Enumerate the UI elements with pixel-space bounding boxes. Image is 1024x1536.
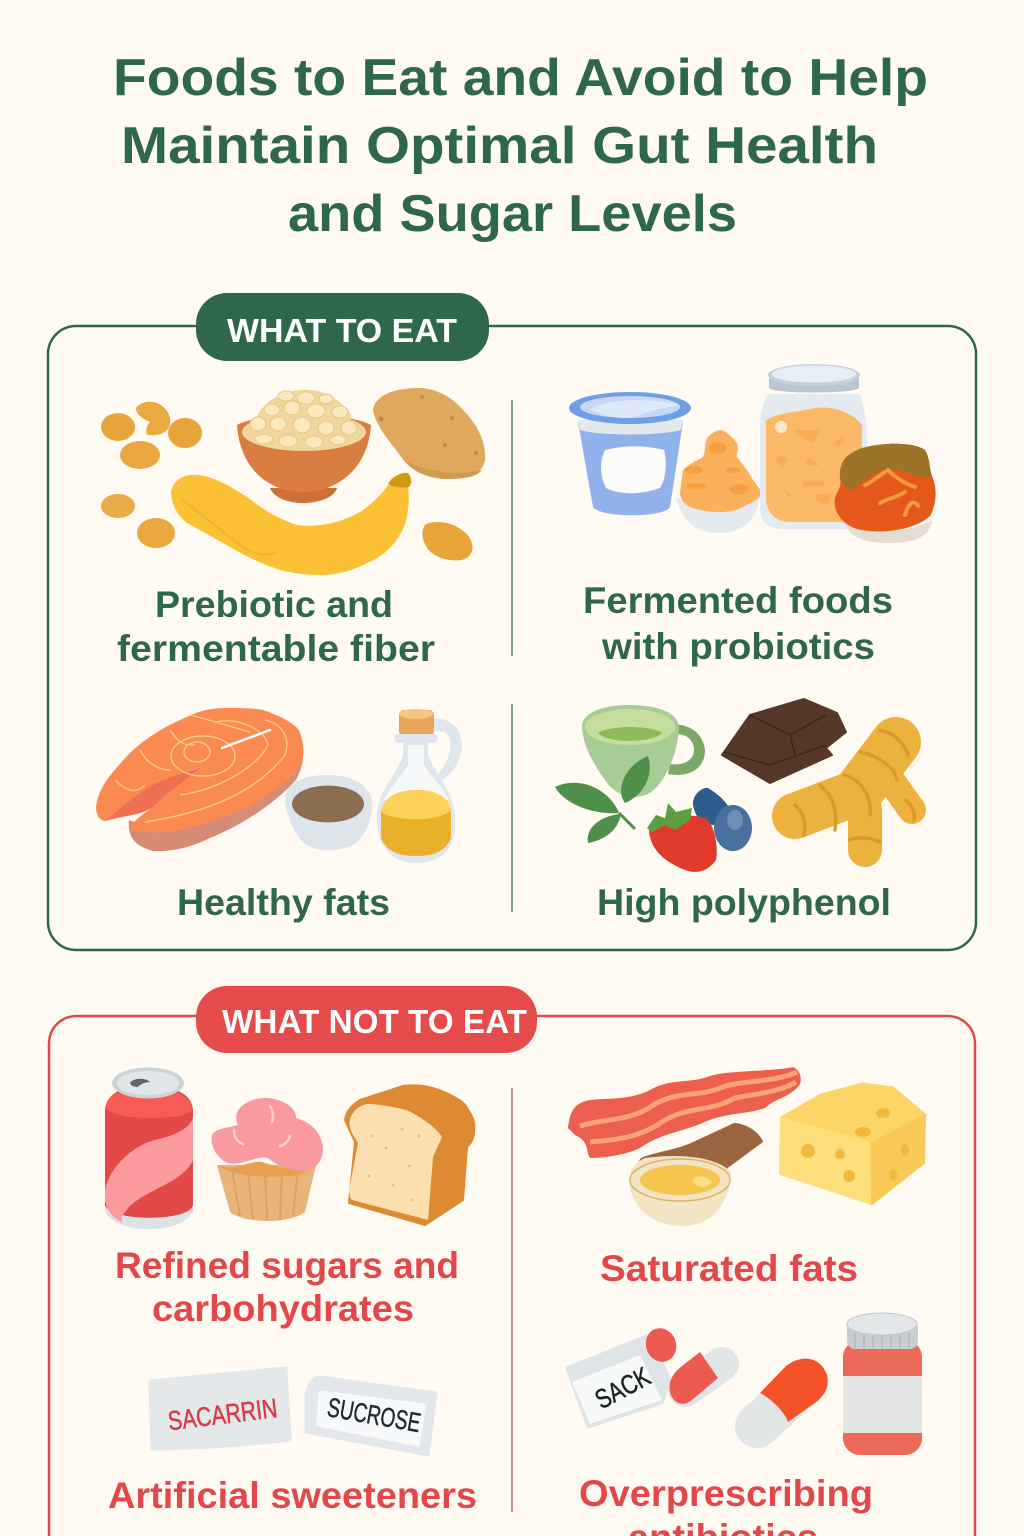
illustration: prebiotic foods <box>101 388 485 575</box>
badge: what to eat <box>196 293 489 361</box>
title: Foods to Eat and Avoid to Help <box>113 49 928 107</box>
illustration: antibiotics <box>567 1313 922 1455</box>
label: healthy fats: Healthy fats <box>177 882 390 923</box>
label: prebiotic and fermentable fiber <box>117 584 435 669</box>
label: fermented foods with probiotics <box>583 580 893 667</box>
illustration: artificial sweetener packets: SACARRIN <box>166 1393 279 1436</box>
illustration: artificial sweetener packets <box>150 1368 436 1455</box>
label: fermented foods with probiotics: Fermented foods <box>583 580 893 621</box>
label: refined sugars and carbohydrates: carbohydrates <box>152 1288 414 1329</box>
label: refined sugars and carbohydrates <box>115 1245 459 1329</box>
label: overprescribing antibiotics <box>579 1473 873 1536</box>
label: prebiotic and fermentable fiber: fermentable fiber <box>117 628 435 669</box>
illustration: antibiotics: SACK <box>590 1361 655 1415</box>
illustration: high polyphenol foods <box>555 699 914 872</box>
badge: what not to eat: WHAT NOT TO EAT <box>222 1003 527 1040</box>
label: prebiotic and fermentable fiber: Prebiotic and <box>155 584 393 625</box>
illustration: refined sugars and carbohydrates <box>105 1068 474 1229</box>
label: overprescribing antibiotics: Overprescribing <box>579 1473 873 1514</box>
badge: what not to eat <box>196 986 537 1053</box>
title: and Sugar Levels <box>288 185 737 243</box>
label: artificial sweeteners: Artificial sweeteners <box>108 1475 477 1516</box>
panel: what to eat <box>48 293 976 950</box>
title: Maintain Optimal Gut Health <box>121 117 878 175</box>
illustration: artificial sweetener packets: SUCROSE <box>325 1392 423 1438</box>
badge: what to eat: WHAT TO EAT <box>227 312 457 349</box>
illustration: saturated fats <box>568 1067 925 1226</box>
illustration: healthy fats <box>96 708 462 863</box>
label: saturated fats: Saturated fats <box>600 1248 858 1289</box>
title <box>113 49 928 243</box>
panel: what not to eat <box>49 986 975 1536</box>
illustration: fermented foods <box>569 364 936 543</box>
label: high polyphenol: High polyphenol <box>597 882 891 923</box>
label: refined sugars and carbohydrates: Refined sugars and <box>115 1245 459 1286</box>
label: fermented foods with probiotics: with probiotics <box>601 626 875 667</box>
